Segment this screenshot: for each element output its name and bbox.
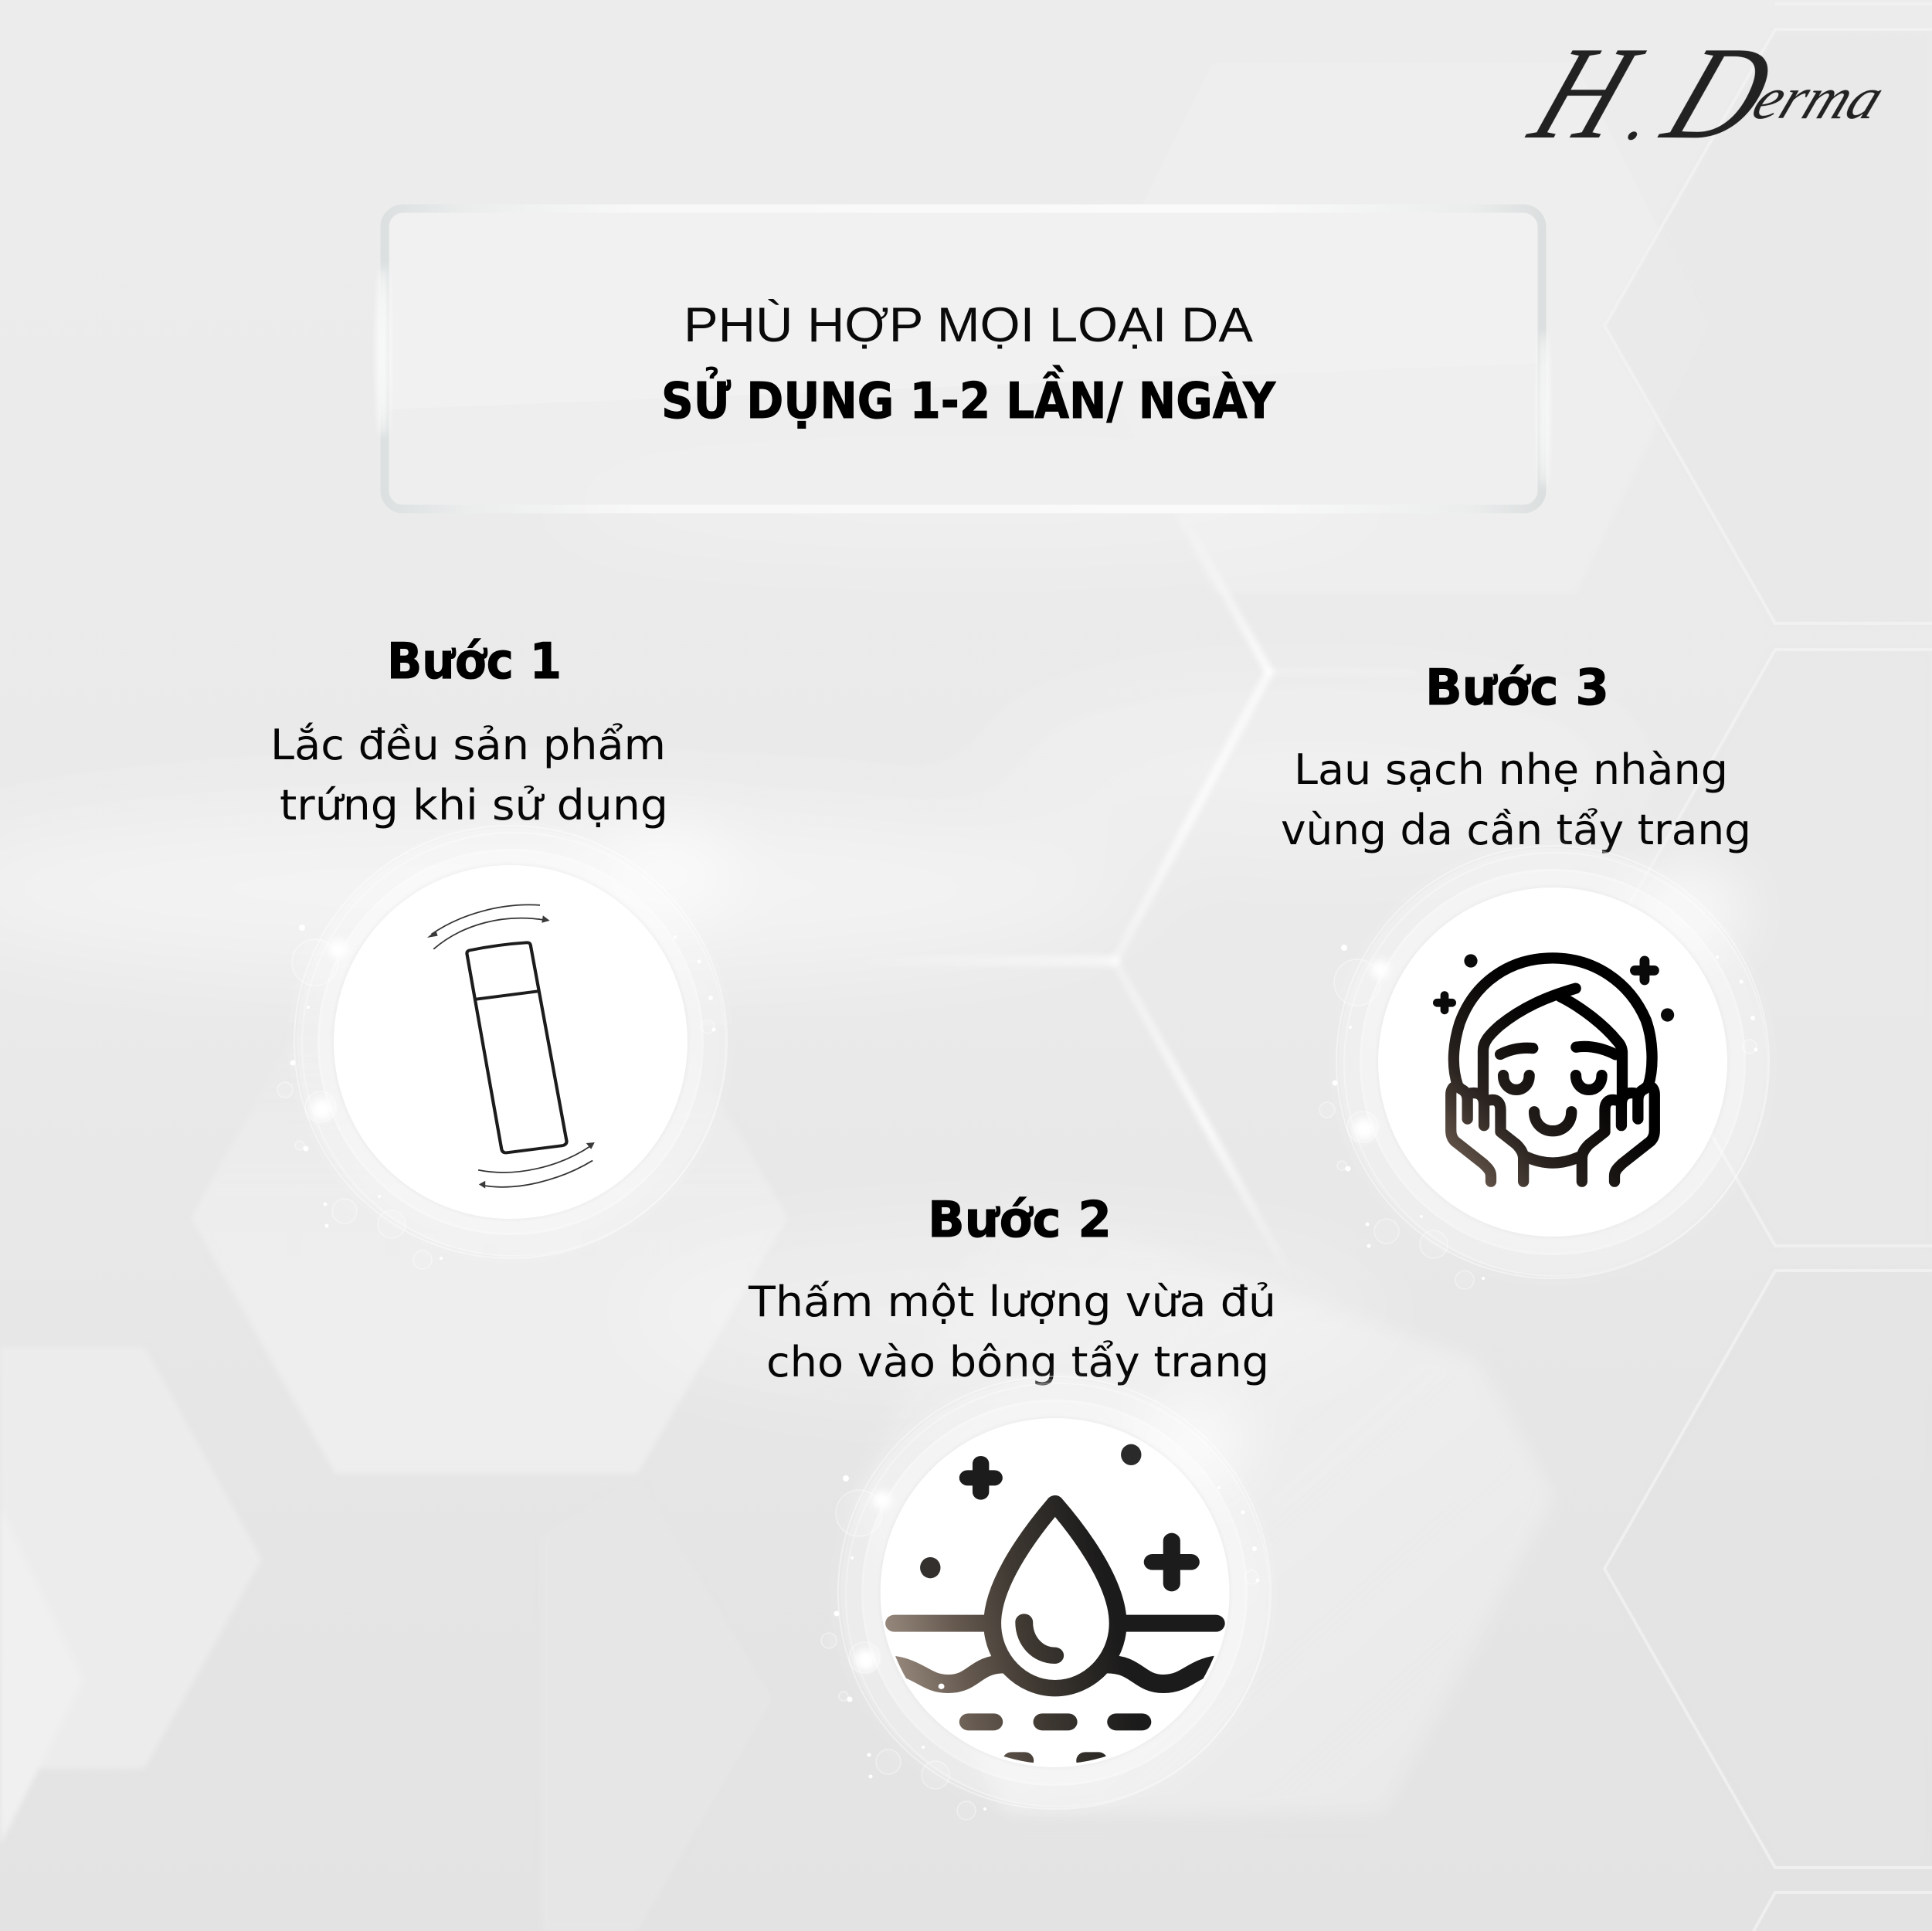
step 3 heading: Bước 3 <box>1425 660 1609 717</box>
icon: water drop on skin <box>878 1444 1228 1760</box>
panel heading line 2: SỬ DỤNG 1-2 LẦN/ NGÀY <box>661 365 1276 430</box>
step 2 heading: Bước 2 <box>928 1192 1112 1249</box>
step 3 text: Lau sạch nhẹ nhàng <box>1294 745 1728 794</box>
step 2 text: Thấm một lượng vừa đủ <box>748 1278 1276 1326</box>
logo: H. Derma <box>1513 19 1913 166</box>
icon circle: step 3 face <box>1319 842 1773 1289</box>
logo: H. Derma: erma <box>1744 65 1894 131</box>
panel heading line 1: PHÙ HỢP MỌI LOẠI DA <box>684 298 1253 352</box>
step 2 text: cho vào bông tẩy trang <box>766 1338 1269 1386</box>
logo: H. Derma: D <box>1645 19 1793 166</box>
icon circle: step 1 bottle <box>277 822 731 1269</box>
icon circle: step 2 drop <box>821 1373 1275 1820</box>
step 1 text: Lắc đều sản phẩm <box>270 721 666 769</box>
icon: face with hands <box>1437 958 1655 1182</box>
icon: shaking bottle <box>427 904 595 1189</box>
step 1 heading: Bước 1 <box>387 633 562 691</box>
step 3 text: vùng da cần tẩy trang <box>1281 806 1751 854</box>
logo: H. Derma: . <box>1618 76 1667 154</box>
step 1 text: trứng khi sử dụng <box>280 781 668 830</box>
panel: usage summary <box>377 209 1549 509</box>
logo: H. Derma: H <box>1513 19 1660 166</box>
